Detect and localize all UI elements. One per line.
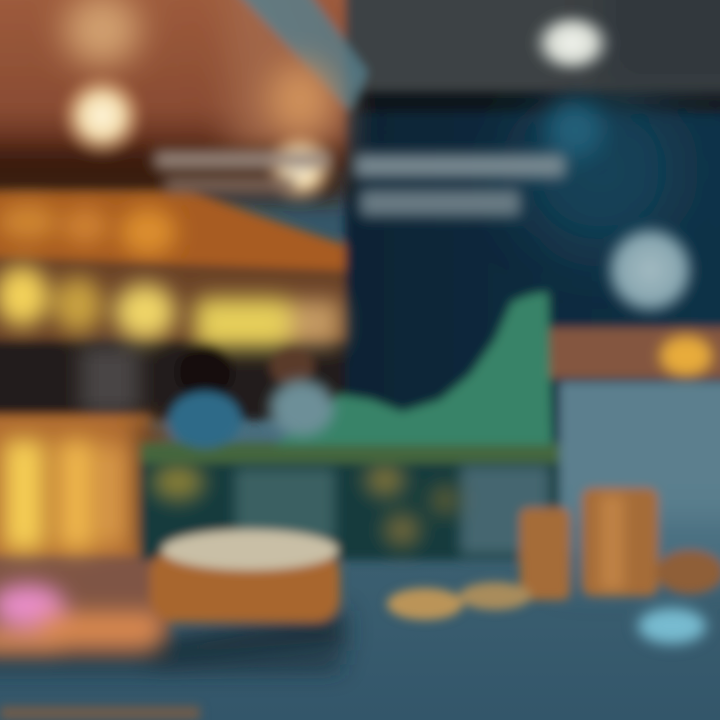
pink counter lights (0, 585, 160, 650)
bottom edge warm glow (0, 706, 200, 720)
floor reflection (638, 608, 706, 644)
panel: grey ceiling at top right (300, 0, 720, 90)
coins: scattered flat (387, 582, 531, 620)
bread loaf on the counter (150, 530, 340, 622)
people: two seated figures (169, 344, 334, 448)
pillars: warm lit columns (4, 440, 125, 550)
diagonal light beam (225, 0, 368, 112)
coins: stacks (520, 488, 720, 600)
blurred headline text block (155, 152, 565, 216)
green table holding the chart (140, 443, 560, 560)
right side restaurant strip (550, 328, 720, 378)
windows: glowing yellow panes (0, 266, 340, 348)
floor background (0, 380, 720, 720)
panel: warm restaurant interior on the left (0, 0, 346, 669)
panel: dark navy wall on the right (345, 85, 720, 580)
ceiling lamps (60, 0, 698, 318)
chart: green rising area (275, 292, 552, 445)
